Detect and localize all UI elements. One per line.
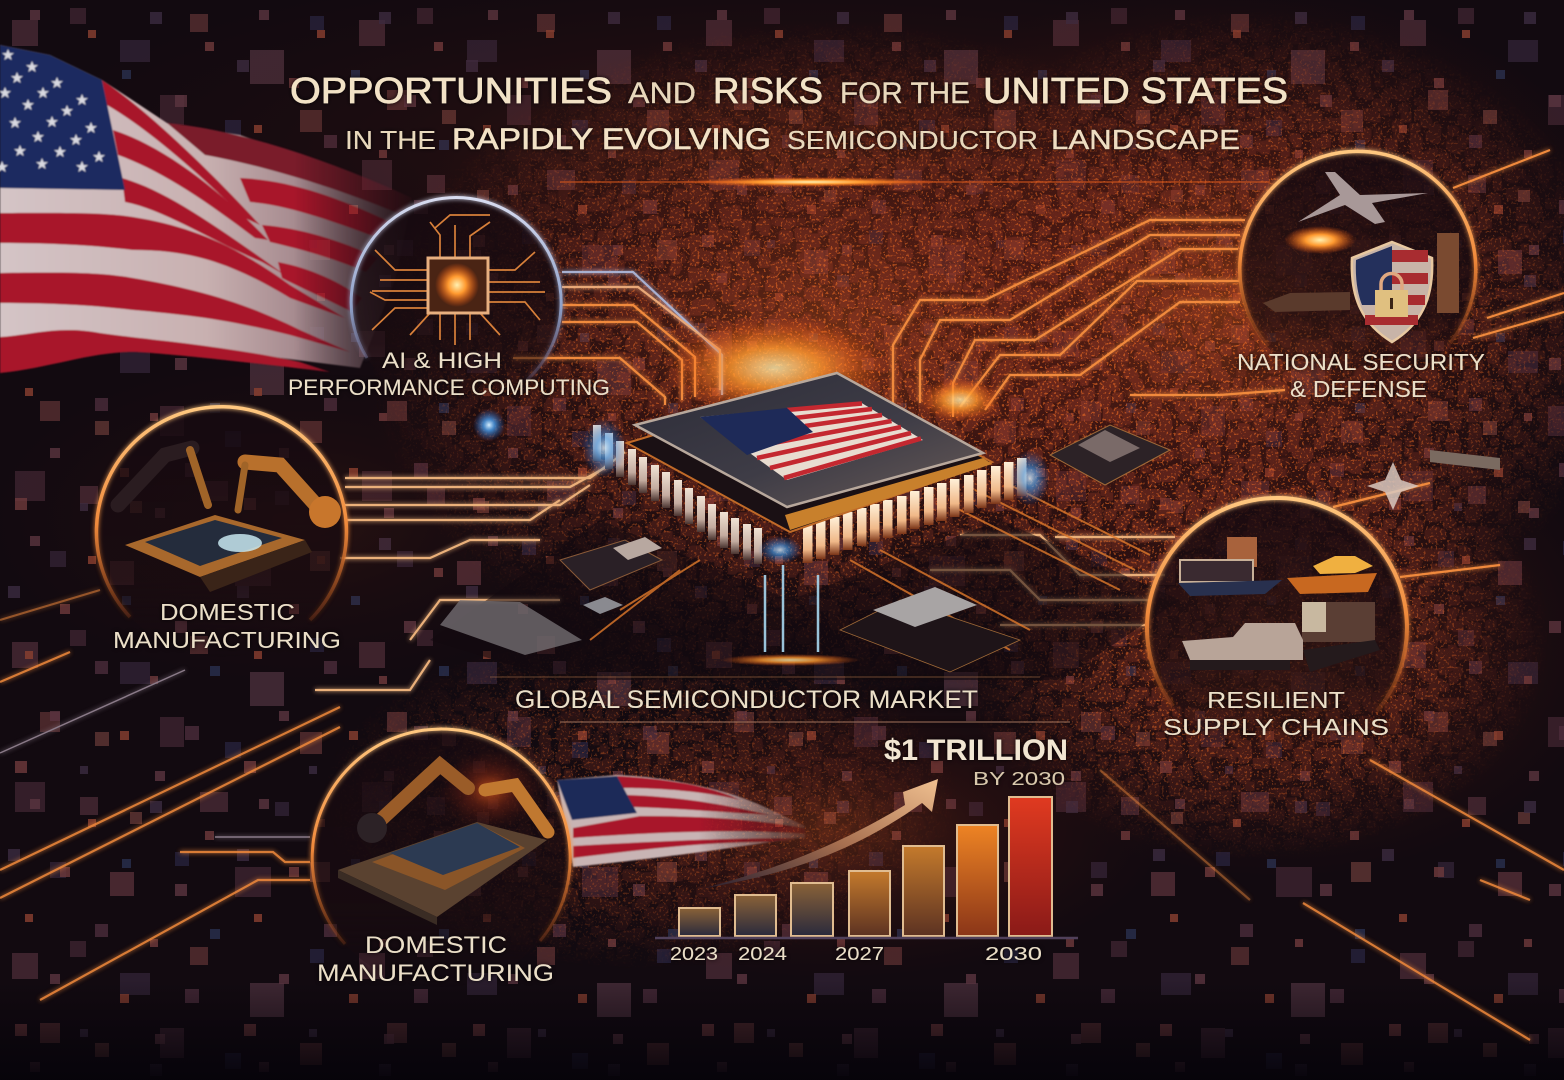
- panel: domestic manufacturing 1: [96, 407, 347, 657]
- year labels: 2023: [670, 944, 718, 964]
- icon: cargo ship orange: [1287, 556, 1377, 594]
- label: domestic manufacturing 2: DOMESTIC: [365, 932, 507, 959]
- title: [290, 70, 1288, 156]
- title: LANDSCAPE: [1051, 124, 1240, 155]
- label: domestic manufacturing 1: [113, 599, 341, 653]
- title: RISKS: [713, 70, 823, 111]
- callout: 1 trillion by 2030: $1 TRILLION: [884, 734, 1068, 767]
- title: IN THE: [345, 125, 436, 155]
- title: OPPORTUNITIES: [290, 70, 612, 111]
- icon: truck: [1182, 602, 1380, 672]
- icon: robot arms: [118, 448, 341, 528]
- chip base: [627, 380, 992, 532]
- label: resilient supply chains: [1163, 687, 1389, 740]
- title: SEMICONDUCTOR: [787, 125, 1038, 155]
- panel: AI and high performance computing: [351, 197, 561, 407]
- chip top face: [635, 373, 983, 507]
- circuit board under chip: [430, 425, 1500, 680]
- icon: ground vehicle: [1263, 292, 1350, 312]
- panel: domestic manufacturing 2: [312, 729, 570, 987]
- label: resilient supply chains: SUPPLY CHAINS: [1163, 714, 1389, 740]
- growth arrow: [705, 779, 938, 888]
- year labels: 2024: [738, 944, 787, 964]
- icon: shield with flag: [1352, 242, 1432, 342]
- heading: global semiconductor market: GLOBAL SEMICONDUCTOR MARKET: [515, 686, 978, 714]
- icon: tower: [1437, 233, 1459, 313]
- callout: 1 trillion by 2030: [884, 734, 1068, 789]
- panel: resilient supply chains: [1147, 498, 1407, 758]
- flag canton: [0, 45, 125, 190]
- label: domestic manufacturing 2: MANUFACTURING: [317, 960, 554, 987]
- icon: aircraft: [1298, 172, 1428, 224]
- label: AI and HPC: PERFORMANCE COMPUTING: [288, 375, 610, 400]
- chip side glows: [473, 409, 1050, 564]
- bars: [679, 797, 1052, 936]
- year labels: 2027: [835, 944, 884, 964]
- callout: 1 trillion by 2030: BY 2030: [973, 769, 1065, 789]
- year labels: [670, 944, 1042, 964]
- label: domestic manufacturing 2: [317, 932, 554, 987]
- title: AND: [628, 77, 696, 110]
- distant parts: [1430, 450, 1500, 470]
- panel: national security and defense: [1239, 151, 1476, 388]
- chip flag: [700, 402, 923, 480]
- flag stripes: [0, 80, 412, 373]
- label: resilient supply chains: RESILIENT: [1207, 687, 1345, 713]
- chip pins: [593, 425, 762, 564]
- title divider glow: [560, 177, 1270, 187]
- label: AI and HPC: [288, 348, 610, 400]
- icon: processor: [370, 215, 545, 345]
- central chip with flag: [473, 318, 1050, 564]
- chip data lines: [720, 565, 860, 666]
- label: national security: NATIONAL SECURITY: [1237, 349, 1485, 375]
- small chip left: [560, 537, 662, 590]
- memory module left: [440, 600, 582, 655]
- icon: wafer stack: [338, 822, 547, 925]
- chip upper right: [1050, 425, 1170, 485]
- flag: behind chart: [557, 775, 805, 867]
- icon: ship: [1178, 537, 1282, 596]
- icon: wafer platform: [125, 515, 312, 592]
- year labels: 2030: [985, 944, 1042, 964]
- label: national security: [1237, 349, 1485, 402]
- label: AI and HPC: AI & HIGH: [382, 348, 502, 373]
- title: UNITED STATES: [983, 70, 1288, 111]
- icon: explosion glow: [1284, 226, 1356, 254]
- icon: robot arms: [357, 765, 548, 843]
- bar chart: market growth: [655, 779, 1078, 964]
- small part: [583, 597, 623, 614]
- label: national security: & DEFENSE: [1290, 376, 1427, 402]
- title: RAPIDLY EVOLVING: [452, 123, 771, 156]
- label: domestic manufacturing 1: DOMESTIC: [160, 599, 295, 625]
- flag: top left: [0, 45, 412, 373]
- board with module right: [840, 587, 1020, 672]
- label: domestic manufacturing 1: MANUFACTURING: [113, 627, 341, 653]
- sparkle: [1367, 462, 1419, 510]
- title: FOR THE: [840, 77, 970, 110]
